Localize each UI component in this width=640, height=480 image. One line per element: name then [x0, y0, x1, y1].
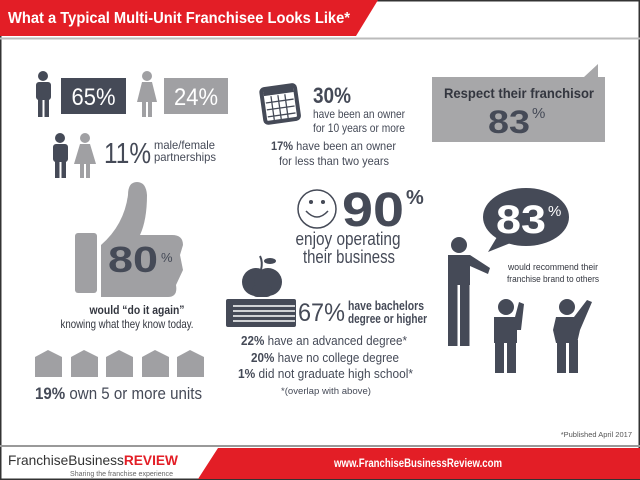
icon: woman — [137, 71, 157, 117]
stat: 90% enjoy: their business — [303, 247, 395, 267]
text: do it again: would “do it again” — [89, 303, 184, 317]
stat: 30% owners 10+ years: for 10 years or more — [313, 121, 405, 135]
text: recommend: franchise brand to others — [507, 274, 599, 285]
text: education details — [238, 333, 413, 396]
stat: 30% owners 10+ years: for less than two years — [279, 154, 389, 168]
text: education details: 20% have no college degree — [251, 350, 399, 365]
icon: man — [36, 71, 51, 117]
footer logo: FranchiseBusinessREVIEW — [8, 452, 179, 468]
title banner: What a Typical Multi-Unit Franchisee Looks Like* — [8, 10, 351, 27]
text: education details: 22% have an advanced degree* — [241, 333, 407, 348]
text: do it again: knowing what they know today. — [60, 317, 194, 331]
icon: three people — [448, 237, 592, 373]
stat: 67% bachelors — [298, 298, 427, 327]
callout: respect franchisor 83%: 83 — [488, 104, 530, 140]
stat: 11% partnerships — [104, 138, 216, 170]
text: do it again — [60, 303, 194, 331]
icon: thumbs up with 80%: 80 — [108, 239, 158, 280]
stat box: 65% men — [61, 78, 126, 114]
footer logo — [8, 452, 179, 478]
stat: 30% owners 10+ years: 30% — [313, 83, 351, 108]
stat: 11% partnerships: partnerships — [154, 150, 216, 164]
text: published note: *Published April 2017 — [561, 430, 632, 439]
stat: 30% owners 10+ years: 17% have been an owner — [271, 139, 396, 153]
icon: thumbs up with 80% — [75, 182, 183, 297]
stat: 11% partnerships: male/female — [154, 138, 215, 152]
text: recommend — [507, 262, 599, 285]
icon: apple and books — [226, 256, 296, 327]
callout: 83% recommend bubble — [483, 188, 569, 252]
icon: calendar — [261, 85, 299, 123]
stat box: 24% women: 24% — [174, 84, 218, 111]
footer logo: Sharing the franchise experience — [70, 471, 173, 478]
stat: 67% bachelors: have bachelors — [348, 298, 424, 313]
icon: five houses — [35, 350, 204, 377]
stat: 90% enjoy: 90 — [342, 184, 404, 237]
text: education details: 1% did not graduate high school* — [238, 366, 413, 381]
text: recommend: would recommend their — [507, 262, 598, 273]
callout: respect franchisor 83%: Respect their franchisor — [444, 85, 595, 101]
icon: couple — [53, 133, 96, 178]
stat box: 65% men: 65% — [72, 84, 116, 111]
callout: 83% recommend bubble: % — [548, 203, 561, 220]
stat: 30% owners 10+ years — [271, 83, 405, 168]
title banner — [0, 0, 378, 36]
stat box: 24% women — [164, 78, 228, 114]
stat: 90% enjoy: enjoy operating — [296, 229, 400, 249]
footer url banner: www.FranchiseBusinessReview.com — [333, 456, 502, 470]
callout: respect franchisor 83% — [432, 64, 605, 142]
stat: 67% bachelors: 67% — [298, 299, 345, 327]
callout: 83% recommend bubble: 83 — [496, 198, 546, 242]
stat: 90% enjoy: % — [406, 187, 424, 209]
stat: 90% enjoy — [296, 184, 424, 267]
text: education details: *(overlap with above) — [281, 386, 371, 396]
icon: smiley — [298, 190, 336, 228]
callout: respect franchisor 83%: % — [532, 105, 545, 122]
footer url banner — [198, 448, 640, 479]
stat: 67% bachelors: degree or higher — [348, 311, 427, 326]
icon: thumbs up with 80%: % — [161, 250, 173, 265]
text: 19% own 5+ units: 19% own 5 or more units — [35, 384, 202, 403]
stat: 30% owners 10+ years: have been an owner — [313, 107, 405, 121]
stat: 11% partnerships: 11% — [104, 138, 151, 170]
